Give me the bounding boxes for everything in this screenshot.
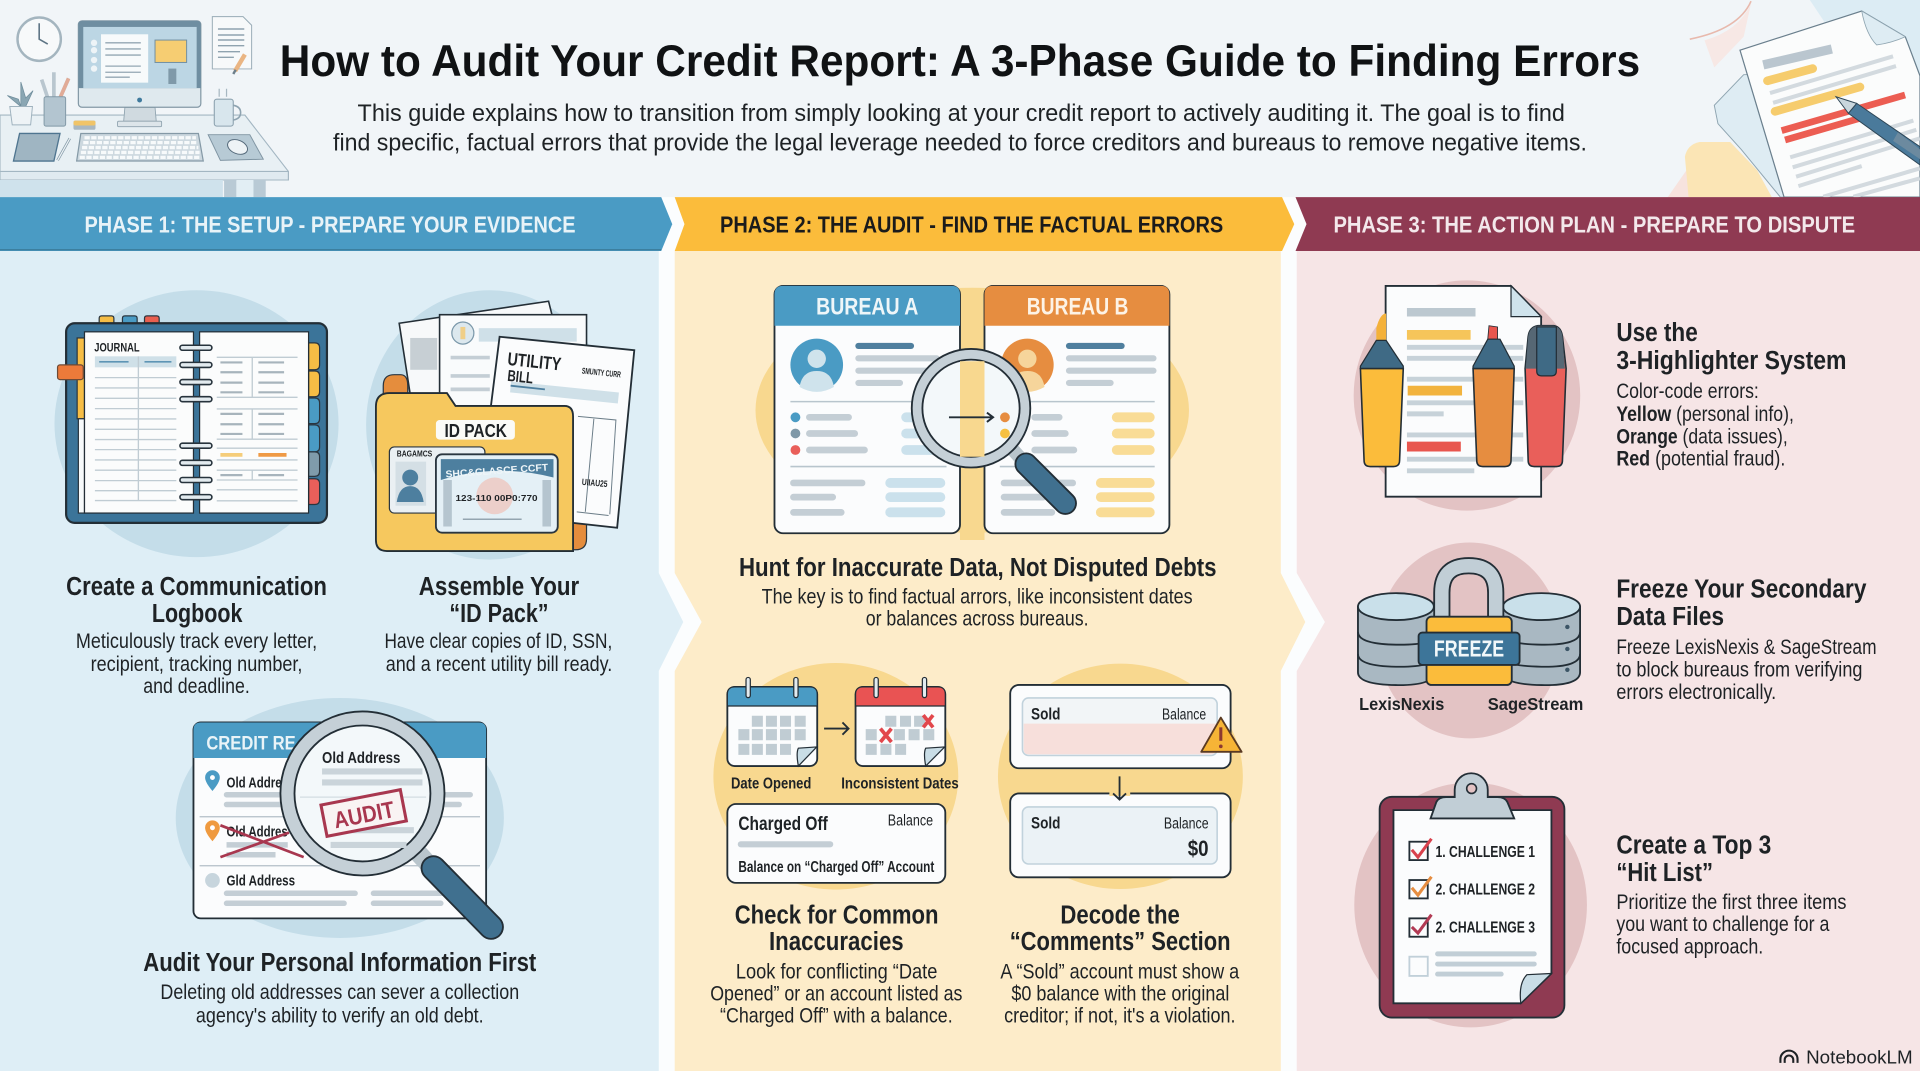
ID pack tag: ID PACK: [444, 420, 508, 441]
text: common inaccuracies description: Opened” or an account listed as: [710, 982, 962, 1005]
illustration: credit report with magnifier: Old Addres: [227, 824, 288, 840]
orange highlighter: [1473, 326, 1514, 467]
heading: highlighter system: Use the: [1616, 319, 1698, 347]
stamp: audit: AUDIT: [331, 796, 397, 833]
utility bill sheet: UTILITY: [507, 348, 562, 375]
card: charged off: Balance on “Charged Off” Account: [738, 859, 934, 876]
heading: freeze secondary data files: Freeze Your Secondary: [1616, 575, 1867, 603]
icon: warning triangle: [1201, 718, 1242, 752]
illustration: sold account comparison: [998, 664, 1243, 889]
heading: hit list: Create a Top 3: [1616, 831, 1771, 859]
heading: hit list: [1616, 831, 1771, 887]
illustration: three highlighters on document: [1354, 280, 1580, 511]
text: freeze description: Freeze LexisNexis & SageStream: [1616, 636, 1877, 659]
intro text: find specific, factual errors that provide the legal leverage needed to force creditors and bureaus to remove negative items.: [333, 130, 1587, 157]
utility bill sheet: [491, 337, 634, 528]
text: hit list description: Prioritize the first three items: [1616, 891, 1847, 914]
utility bill sheet: BILL: [507, 368, 534, 388]
icon: desk surface: [0, 115, 288, 197]
illustration: credit report with magnifier: [176, 698, 504, 938]
card: sold with balance: [1010, 685, 1231, 768]
checklist item 2: 2. CHALLENGE 2: [1435, 882, 1535, 899]
arrow: [1109, 776, 1130, 800]
journal label: JOURNAL: [94, 340, 140, 354]
illustration: communication logbook: [54, 290, 339, 557]
social security card: [436, 454, 558, 533]
panel: phase 2 background: [675, 251, 1305, 1071]
text: highlighter description: Orange (data issues),: [1616, 425, 1788, 448]
text: audit personal information description: [160, 981, 519, 1027]
calendar labels: [731, 776, 959, 793]
NotebookLM logo: NotebookLM: [1806, 1046, 1913, 1067]
text: highlighter description: Red (potential fraud).: [1616, 447, 1785, 470]
text: hit list description: you want to challenge for a: [1616, 913, 1830, 936]
card: charged off: [727, 804, 945, 883]
red highlighter: [1525, 326, 1566, 467]
text: logbook description: [76, 630, 317, 698]
text: logbook description: Meticulously track every letter,: [76, 630, 317, 653]
text: hit list description: [1616, 891, 1847, 958]
panel: phase 1 background: [0, 251, 683, 1071]
checklist item 3: [1409, 915, 1535, 937]
calendar labels: Inconsistent Dates: [841, 776, 959, 793]
heading: ID pack: “ID Pack”: [449, 600, 549, 628]
database labels: LexisNexis: [1359, 694, 1444, 714]
text: audit personal information description: agency's ability to verify an old debt.: [196, 1004, 484, 1027]
heading: decode comments: Decode the: [1060, 901, 1180, 929]
text: decode comments description: creditor; if not, it's a violation.: [1004, 1004, 1236, 1027]
heading: communication logbook: Logbook: [152, 600, 243, 628]
ID card: BAGAMCS: [397, 450, 432, 459]
calendar: date opened: [727, 680, 817, 766]
illustration: frozen data files with padlock: [1358, 542, 1583, 738]
illustration: credit report with magnifier: Gld Address: [227, 873, 295, 889]
card: sold with zero balance: $0: [1188, 836, 1209, 861]
illustration: desk with computer: [0, 17, 288, 197]
text: highlighter description: [1616, 380, 1794, 470]
text: ID pack description: Have clear copies of ID, SSN,: [384, 630, 612, 653]
heading: communication logbook: [66, 573, 327, 628]
checklist item 2: [1409, 877, 1535, 899]
utility bill sheet: UIIAU25: [581, 477, 608, 489]
phase 2 banner: [675, 197, 1294, 251]
phase 1 banner: PHASE 1: THE SETUP - PREPARE YOUR EVIDENCE: [84, 212, 576, 238]
magnifier: [280, 711, 491, 927]
padlock: FREEZE: [1434, 635, 1504, 661]
icon: note page and pencil: [212, 17, 252, 74]
arrow: [824, 722, 849, 735]
text: decode comments description: A “Sold” account must show a: [1000, 960, 1240, 983]
card: sold with balance: Balance: [1162, 706, 1206, 723]
calendar: inconsistent dates: [856, 680, 945, 766]
icon: computer monitor: [78, 21, 201, 127]
heading: freeze secondary data files: [1616, 575, 1867, 631]
text: ID pack description: [384, 630, 612, 676]
text: hunt description: or balances across bureaus.: [866, 608, 1089, 631]
text: ID pack description: and a recent utility bill ready.: [386, 653, 612, 676]
heading: ID pack: Assemble Your: [419, 573, 579, 601]
card: sold with zero balance: [1010, 793, 1231, 877]
icon: keyboard: [77, 133, 203, 161]
bureau B report: [984, 286, 1169, 533]
intro text: This guide explains how to transition from simply looking at your credit report to actively auditing it. The goal is to find: [358, 100, 1565, 127]
heading: common inaccuracies: [735, 901, 939, 956]
checklist item 1: 1. CHALLENGE 1: [1435, 844, 1535, 861]
illustration: clipboard hit list: [1354, 773, 1587, 1027]
illustration: ID pack folder: [366, 290, 634, 560]
checklist item 4 empty: [1409, 954, 1534, 976]
checklist item 1: [1409, 839, 1535, 861]
heading: communication logbook: Create a Communication: [66, 573, 327, 601]
title: How to Audit Your Credit Report: A 3-Phase Guide to Finding Errors: [280, 37, 1640, 86]
icon: wall clock: [18, 18, 61, 61]
illustration: calendars and charged off card: [713, 663, 959, 890]
text: highlighter description: Color-code errors:: [1616, 380, 1759, 403]
icon: plant pot and pen cup: [7, 72, 69, 126]
heading: highlighter system: 3-Highlighter System: [1616, 347, 1847, 375]
social security card: 123-110 00P0:770: [456, 493, 538, 503]
phase 1 banner: [0, 197, 672, 251]
yellow highlighter: [1360, 313, 1403, 467]
utility bill sheet: SMUNTY CURR: [581, 366, 622, 380]
phase 3 banner: PHASE 3: THE ACTION PLAN - PREPARE TO DISPUTE: [1333, 212, 1855, 238]
heading: audit personal information: Audit Your Personal Information First: [143, 949, 537, 977]
calendar labels: Date Opened: [731, 776, 811, 793]
database labels: SageStream: [1488, 694, 1583, 714]
illustration: bureau A and B comparison: [756, 286, 1189, 540]
heading: hit list: “Hit List”: [1616, 859, 1713, 887]
magnifier: Old Address: [322, 750, 401, 767]
text: logbook description: and deadline.: [143, 675, 250, 698]
text: common inaccuracies description: Look for conflicting “Date: [736, 960, 937, 983]
text: highlighter description: Yellow (personal info),: [1616, 403, 1794, 426]
card: charged off: Charged Off: [738, 813, 828, 835]
social security card: SHC&CLASCE CCFT: [445, 462, 549, 481]
header band: [0, 0, 1920, 197]
intro text: [333, 100, 1587, 157]
phase 3 banner: [1296, 197, 1920, 251]
bureau A report: BUREAU A: [816, 294, 919, 321]
illustration: audited document with pen: [1740, 11, 1920, 197]
text: hit list description: focused approach.: [1616, 935, 1763, 958]
icon: notebook and pen: [13, 133, 70, 161]
heading: freeze secondary data files: Data Files: [1616, 603, 1724, 631]
card: sold with zero balance: Sold: [1031, 813, 1060, 832]
text: hunt description: The key is to find factual arrors, like inconsistent dates: [762, 586, 1193, 609]
padlock: [1419, 566, 1520, 685]
illustration: credit report with magnifier: CREDIT RE: [206, 732, 296, 754]
checklist item 3: 2. CHALLENGE 3: [1435, 920, 1535, 937]
text: freeze description: to block bureaus from verifying: [1616, 659, 1862, 682]
text: audit personal information description: Deleting old addresses can sever a collection: [160, 981, 519, 1004]
text: freeze description: [1616, 636, 1877, 704]
heading: highlighter system: [1616, 319, 1847, 375]
text: decode comments description: $0 balance with the original: [1011, 982, 1229, 1005]
panel: phase 3 background: [1297, 251, 1920, 1071]
phase 2 banner: PHASE 2: THE AUDIT - FIND THE FACTUAL ERRORS: [720, 212, 1223, 238]
text: hunt description: [762, 586, 1193, 631]
icon: mouse pad and mouse: [208, 135, 263, 160]
database: SageStream: [1503, 593, 1580, 685]
heading: decode comments: [1010, 901, 1231, 956]
database labels: [1359, 694, 1583, 714]
heading: common inaccuracies: Check for Common: [735, 901, 939, 929]
illustration: credit report with magnifier: Old Addre: [227, 775, 282, 791]
magnifier with arrow: [912, 349, 1065, 503]
heading: decode comments: “Comments” Section: [1010, 928, 1231, 956]
ID card: [389, 447, 485, 513]
text: logbook description: recipient, tracking number,: [91, 653, 302, 676]
bureau B report: BUREAU B: [1027, 294, 1128, 321]
heading: ID pack: [419, 573, 579, 628]
text: freeze description: errors electronically.: [1616, 681, 1776, 704]
database: LexisNexis: [1358, 593, 1435, 685]
bureau A report: [774, 286, 960, 533]
card: sold with balance: Sold: [1031, 704, 1060, 723]
card: charged off: Balance: [888, 812, 933, 829]
text: decode comments description: [1000, 960, 1240, 1027]
text: common inaccuracies description: [710, 960, 962, 1027]
card: sold with zero balance: Balance: [1164, 815, 1209, 832]
text: common inaccuracies description: “Charged Off” with a balance.: [720, 1004, 953, 1027]
heading: hunt for inaccurate data: Hunt for Inaccurate Data, Not Disputed Debts: [739, 554, 1217, 582]
icon: eraser on desk: [73, 121, 96, 130]
heading: common inaccuracies: Inaccuracies: [769, 928, 904, 956]
icon: coffee mug: [214, 89, 241, 126]
